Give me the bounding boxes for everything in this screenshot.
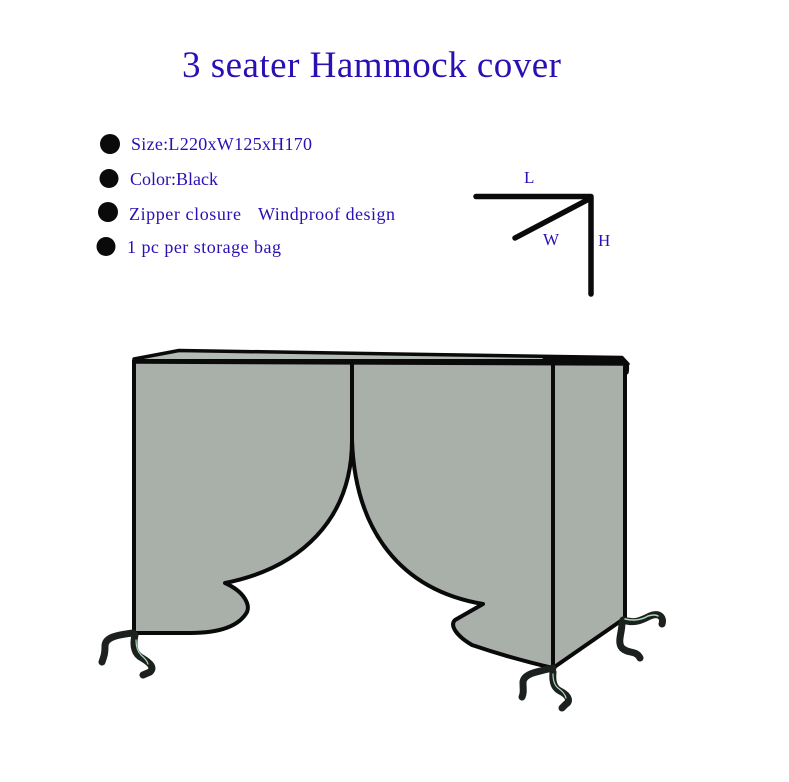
text: storage: 1 pc per storage bag: [127, 237, 281, 257]
cover outline: [134, 360, 625, 668]
cover top panel: [134, 350, 628, 364]
ties: left corner: [102, 633, 152, 675]
dimension diagram: [476, 168, 610, 294]
top right corner: [545, 360, 626, 372]
label: L: L: [524, 168, 534, 187]
bullet: size: [100, 134, 120, 154]
text: size: Size:L220xW125xH170: [131, 134, 312, 154]
title: 3 seater Hammock cover: [182, 45, 561, 86]
ties: right corner: [620, 615, 662, 658]
label: H: H: [598, 231, 610, 250]
text: closure: Zipper closure: [129, 204, 241, 224]
text: color: Color:Black: [130, 169, 218, 189]
text: design: Windproof design: [258, 204, 395, 224]
ties: bottom corner: [522, 668, 568, 708]
bullet: color: [100, 169, 118, 188]
cover body: [134, 361, 625, 668]
label: W: W: [543, 230, 560, 249]
bullet: closure: [98, 202, 118, 222]
feature list: [96, 134, 395, 257]
dimension axes: [476, 196, 591, 294]
hammock cover illustration: [102, 350, 662, 708]
bullet: storage: [96, 237, 116, 256]
